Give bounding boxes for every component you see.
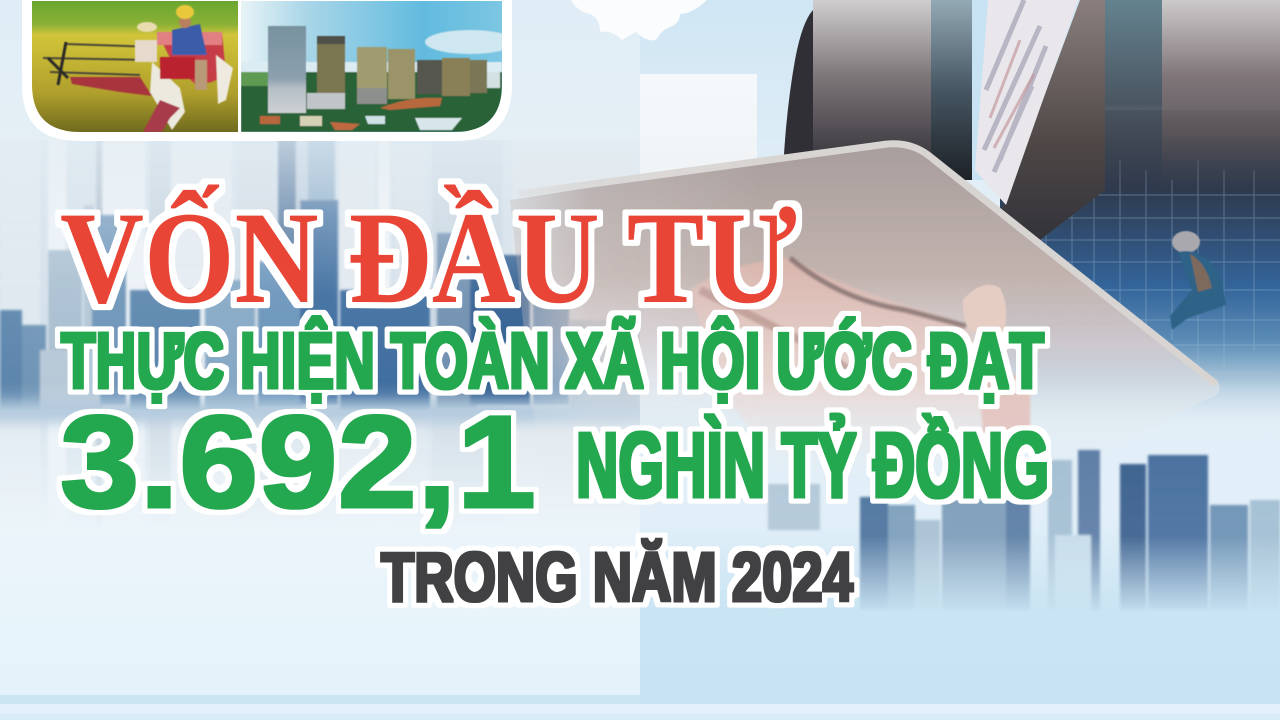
right city skyline [768, 450, 1280, 610]
key figure: 3.692,1: 3.692,1 [60, 388, 536, 535]
photo panel [22, 0, 515, 141]
photo: city towers [241, 1, 515, 132]
gear icon [571, 0, 707, 40]
tablet and hands [510, 140, 1220, 440]
hands [690, 256, 1032, 434]
white block [640, 74, 757, 214]
left city skyline [0, 141, 640, 492]
tie [975, 0, 1078, 205]
icon: construction worker [1170, 231, 1226, 330]
businessman suit [783, 0, 1280, 240]
period: TRONG NĂM 2024: TRONG NĂM 2024 [381, 538, 853, 616]
title: VỐN ĐẦU TƯ: VỐN ĐẦU TƯ [60, 184, 797, 331]
photo: rice harvest [32, 1, 238, 132]
thumb [963, 285, 1006, 332]
construction site image [1000, 110, 1280, 430]
